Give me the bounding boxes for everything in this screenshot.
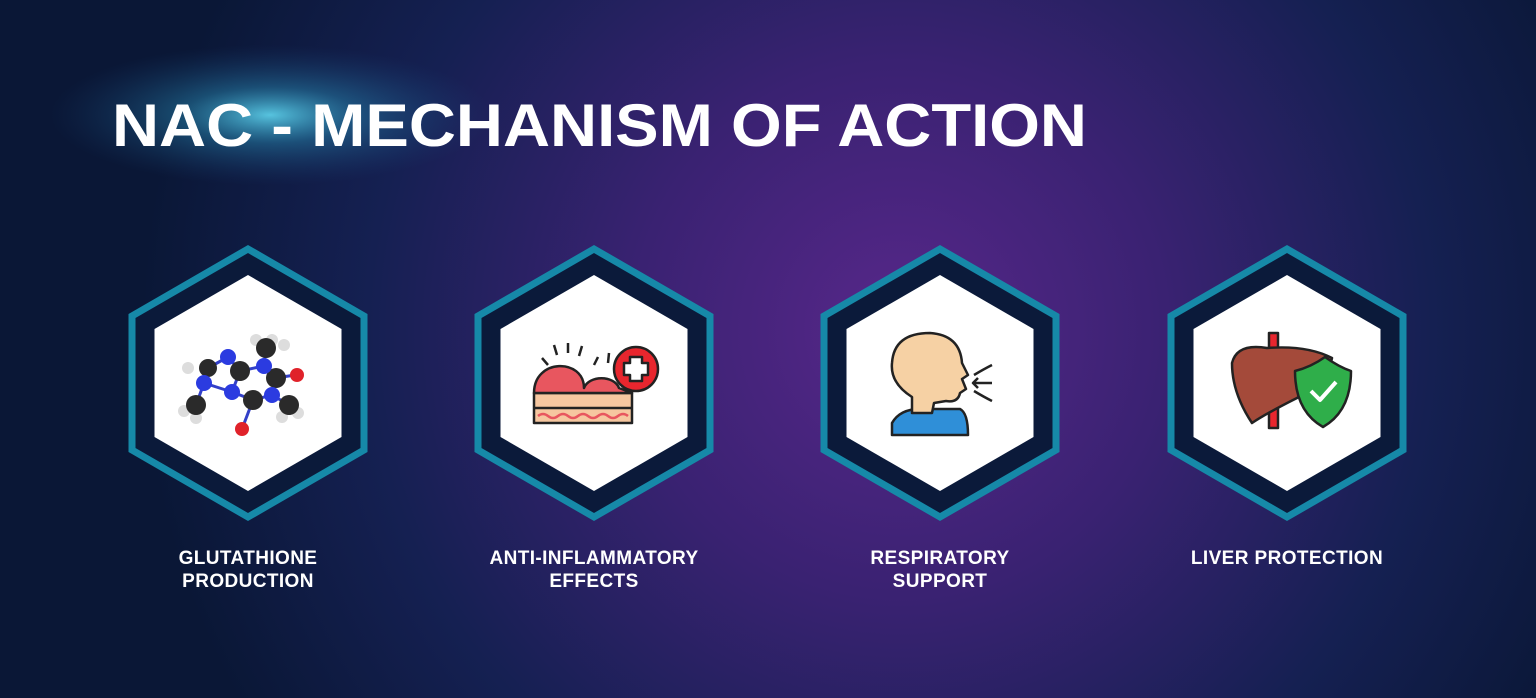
label: anti-inflammatory effects: EFFECTS [549,571,639,592]
icon: molecule [178,334,304,436]
panel: respiratory support [824,249,1056,517]
icon: inflamed skin [534,343,658,423]
label: liver protection: LIVER PROTECTION [1191,548,1383,569]
panel: liver protection [1171,249,1403,517]
icon: liver with shield [1232,333,1351,428]
label: respiratory support: RESPIRATORY [870,548,1010,569]
panel: anti-inflammatory effects [478,249,710,517]
title: NAC - MECHANISM OF ACTION [112,92,1087,159]
icon: person breathing [892,333,992,435]
label: respiratory support: SUPPORT [893,571,987,592]
label: anti-inflammatory effects: ANTI-INFLAMMATORY [489,548,699,569]
panel: glutathione production [132,249,364,517]
label: glutathione production: PRODUCTION [182,571,314,592]
label: glutathione production: GLUTATHIONE [179,548,317,569]
